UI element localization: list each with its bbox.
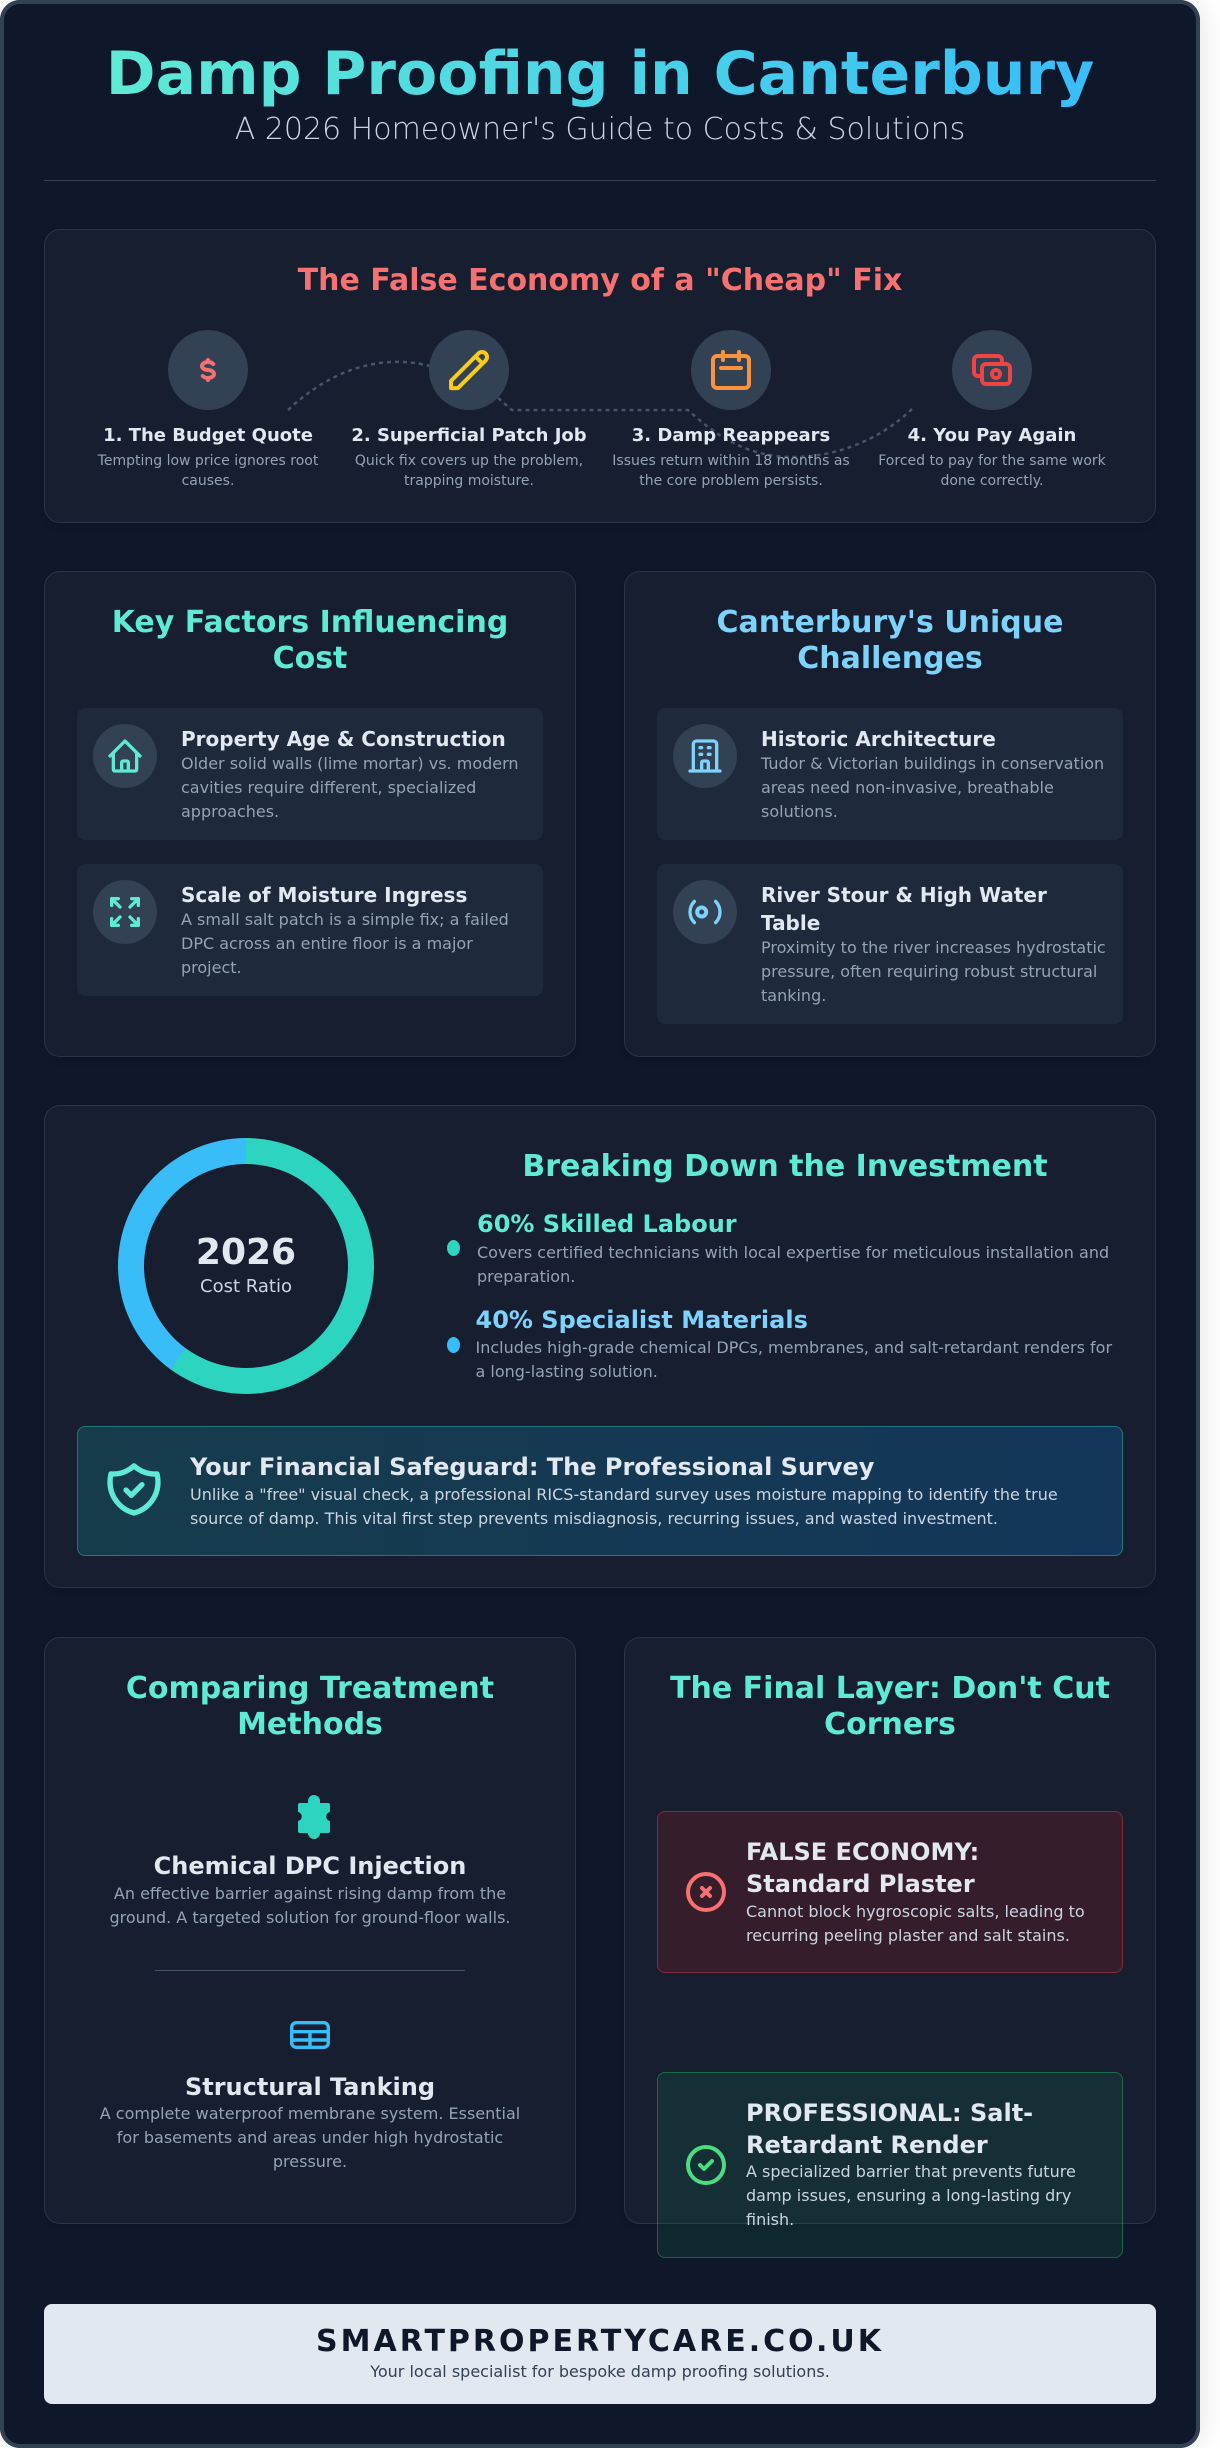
heading: challenges: Canterbury's Unique (717, 605, 1063, 640)
callout text (190, 1485, 1058, 1528)
treatment description (110, 1884, 510, 1927)
treatment: chemical DPC (110, 1795, 510, 1927)
step description: Issues return within 18 months as (612, 453, 850, 469)
comparison title: Standard Plaster (746, 1870, 975, 1898)
comparison title: Retardant Render (746, 2131, 988, 2159)
heading: final layer: The Final Layer: Don't Cut (670, 1671, 1110, 1706)
factor: property age (77, 708, 543, 840)
factor description: Older solid walls (lime mortar) vs. modern (181, 754, 519, 773)
legend description: labour: preparation. (477, 1267, 575, 1286)
comparison text: recurring peeling plaster and salt stains. (746, 1926, 1070, 1945)
heading: investment: Breaking Down the Investment (522, 1149, 1048, 1184)
donut label: Cost Ratio (200, 1276, 292, 1297)
icon: signal (673, 880, 737, 944)
challenge description (760, 754, 1104, 821)
challenge: historic architecture (657, 708, 1123, 840)
heading: treatments (126, 1671, 494, 1742)
comparison text (746, 2162, 1076, 2229)
challenge description: Proximity to the river increases hydrostatic (761, 938, 1106, 957)
treatment description: for basements and areas under high hydrostatic (117, 2128, 503, 2147)
panel: treatment methods (44, 1637, 576, 2224)
legend dot: materials (447, 1337, 460, 1353)
legend title: materials: 40% Specialist Materials (476, 1306, 808, 1334)
icon: cross circle (686, 1872, 726, 1912)
arrows: dashed connectors between steps (287, 360, 913, 458)
heading: false economy: The False Economy of a "Cheap" Fix (298, 263, 902, 298)
comparison title: PROFESSIONAL: Salt- (746, 2099, 1033, 2127)
footer brand: SMARTPROPERTYCARE.CO.UK (316, 2324, 884, 2359)
legend description: labour (477, 1243, 1109, 1286)
panel: investment breakdown (44, 1105, 1156, 1588)
icon: expand arrows (93, 880, 157, 944)
panel: canterbury challenges (624, 571, 1156, 1057)
heading: final layer: Corners (824, 1707, 956, 1742)
legend dot: labour (447, 1240, 460, 1256)
heading: key factors (112, 605, 508, 676)
comparison title (746, 2099, 1033, 2159)
step title: 3. Damp Reappears (632, 425, 830, 446)
comparison text: damp issues, ensuring a long-lasting dry (746, 2186, 1071, 2205)
challenge description: pressure, often requiring robust structural (761, 962, 1097, 981)
heading: treatments: Comparing Treatment (126, 1671, 494, 1706)
comparison text: Cannot block hygroscopic salts, leading to (746, 1902, 1085, 1921)
legend description: materials: Includes high-grade chemical DPCs, membranes, and salt-retardant renders for (476, 1338, 1112, 1357)
factor description: DPC across an entire floor is a major (181, 934, 473, 953)
challenge title: Table (761, 911, 820, 935)
footer tagline: Your local specialist for bespoke damp proofing solutions. (370, 2362, 830, 2381)
step description: Tempting low price ignores root (98, 453, 318, 469)
donut chart (118, 1138, 374, 1394)
icon: check circle (686, 2145, 726, 2185)
icon: pencil (429, 330, 509, 410)
challenge title: River Stour & High Water (761, 883, 1047, 907)
legend description: materials (476, 1338, 1112, 1381)
step description (98, 453, 318, 489)
icon: cash (952, 330, 1032, 410)
step 4: pay again (878, 330, 1106, 489)
heading: challenges (717, 605, 1063, 676)
heading: challenges: Challenges (797, 641, 983, 676)
treatment description: An effective barrier against rising damp from the (114, 1884, 506, 1903)
factor description: project. (181, 958, 242, 977)
icon: tanking table (290, 2021, 330, 2049)
factor: moisture scale (77, 864, 543, 996)
step description: done correctly. (940, 473, 1044, 489)
heading: key factors: Cost (273, 641, 347, 676)
factor description: approaches. (181, 802, 279, 821)
comparison text: A specialized barrier that prevents future (746, 2162, 1076, 2181)
icon: puzzle piece (298, 1795, 330, 1839)
challenge description: solutions. (761, 802, 838, 821)
panel: key factors (44, 571, 576, 1057)
comparison: standard plaster (657, 1811, 1123, 1973)
panel: final layer (624, 1637, 1156, 2224)
step description (355, 453, 583, 489)
treatment description: ground. A targeted solution for ground-floor walls. (110, 1908, 510, 1927)
heading: key factors: Key Factors Influencing (112, 605, 508, 640)
legend description: labour: Covers certified technicians with local expertise for meticulous installation and (477, 1243, 1109, 1262)
step description (878, 453, 1106, 489)
legend: materials (447, 1306, 1112, 1381)
step 3: damp reappears (612, 330, 850, 489)
icon: calendar (691, 330, 771, 410)
icon: building (673, 724, 737, 788)
treatment description: A complete waterproof membrane system. Essential (100, 2104, 520, 2123)
icon: house (93, 724, 157, 788)
step description (612, 453, 850, 489)
callout: professional survey (77, 1426, 1123, 1556)
factor description: cavities require different, specialized (181, 778, 476, 797)
footer banner (44, 2304, 1156, 2404)
treatment description: pressure. (273, 2152, 347, 2171)
step 1: budget quote (98, 330, 318, 489)
challenge title (761, 883, 1047, 935)
step title: 2. Superficial Patch Job (351, 425, 587, 446)
step title: 1. The Budget Quote (103, 425, 313, 446)
challenge description (761, 938, 1106, 1005)
comparison: salt-retardant render (657, 2072, 1123, 2258)
challenge description: tanking. (761, 986, 826, 1005)
icon: dollar (168, 330, 248, 410)
step description: Quick fix covers up the problem, (355, 453, 583, 469)
treatment: structural tanking (100, 2021, 520, 2171)
comparison text (746, 1902, 1085, 1945)
legend description: materials: a long-lasting solution. (476, 1362, 658, 1381)
comparison title: FALSE ECONOMY: (746, 1838, 979, 1866)
treatment description (100, 2104, 520, 2171)
comparison text: finish. (746, 2210, 794, 2229)
factor description (181, 754, 519, 821)
treatment title: Chemical DPC Injection (154, 1852, 466, 1880)
subtitle: A 2026 Homeowner's Guide to Costs & Solutions (235, 112, 965, 147)
legend title: labour: 60% Skilled Labour (477, 1210, 737, 1238)
callout text: Unlike a "free" visual check, a professional RICS-standard survey uses moisture mapping to identify the true (190, 1485, 1058, 1504)
step description: trapping moisture. (404, 473, 534, 489)
donut value: 2026 (196, 1232, 296, 1273)
factor title: Property Age & Construction (181, 727, 506, 751)
callout title: Your Financial Safeguard: The Professional Survey (190, 1453, 874, 1481)
icon: shield (107, 1463, 161, 1516)
panel: false economy (44, 229, 1156, 523)
comparison title (746, 1838, 979, 1898)
step 2: patch job (351, 330, 587, 489)
legend: labour (447, 1210, 1109, 1286)
heading: final layer (670, 1671, 1110, 1742)
challenge description: Tudor & Victorian buildings in conservation (761, 754, 1104, 773)
step title: 4. You Pay Again (908, 425, 1076, 446)
challenge title: Historic Architecture (761, 727, 996, 751)
treatment title: Structural Tanking (185, 2073, 435, 2101)
factor description (181, 910, 509, 977)
step description: the core problem persists. (639, 473, 823, 489)
step description: Forced to pay for the same work (878, 453, 1106, 469)
challenge description: areas need non-invasive, breathable (761, 778, 1054, 797)
step description: causes. (182, 473, 234, 489)
title: Damp Proofing in Canterbury (106, 39, 1094, 109)
factor title: Scale of Moisture Ingress (181, 883, 467, 907)
factor description: A small salt patch is a simple fix; a failed (181, 910, 509, 929)
challenge: river stour (657, 864, 1123, 1024)
heading: treatments: Methods (237, 1707, 383, 1742)
callout text: source of damp. This vital first step prevents misdiagnosis, recurring issues, and wasted investment. (190, 1509, 998, 1528)
